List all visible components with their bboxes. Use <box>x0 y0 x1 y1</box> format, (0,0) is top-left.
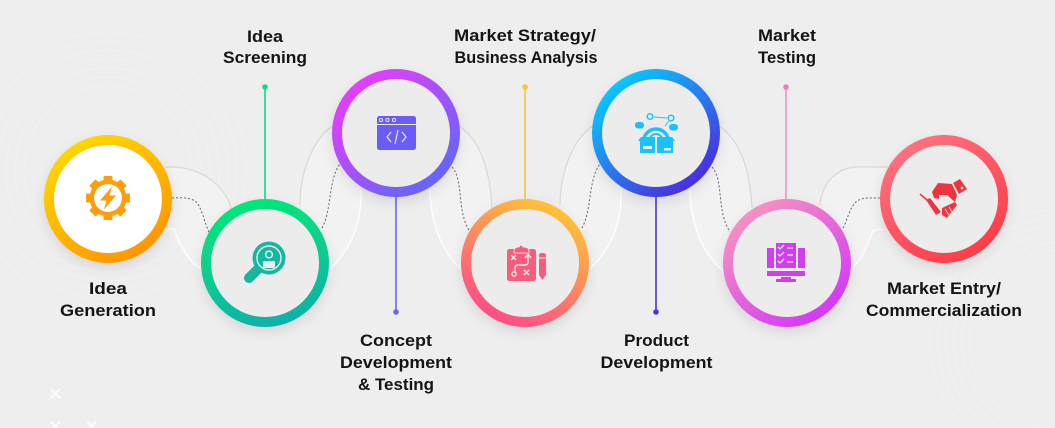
label: market testing: Testing <box>758 49 816 67</box>
step 2: idea screening <box>206 28 324 322</box>
label: market testing <box>758 27 817 67</box>
label: product development: Product <box>624 332 690 350</box>
label: concept development and testing <box>340 332 453 394</box>
icon: handshake <box>920 179 967 218</box>
label: market strategy and business analysis: Business Analysis <box>454 49 598 67</box>
step 3: concept development and testing <box>337 74 455 394</box>
background ring pattern: right <box>930 210 1055 428</box>
label: market entry and commercialization <box>866 280 1022 320</box>
step 5: product development <box>597 74 715 372</box>
connector: step 2 to 3 <box>300 125 362 270</box>
icon: clipboard plan and pencil <box>507 245 546 281</box>
stem and dot 4 <box>522 84 528 202</box>
label: product development <box>600 332 713 372</box>
background ring pattern: left <box>0 32 246 308</box>
label: market entry and commercialization: Commercialization <box>866 302 1022 320</box>
icon: magnifier with person <box>249 242 286 278</box>
ring 4 <box>466 204 584 322</box>
step 6: market testing <box>728 27 846 322</box>
ring 7 <box>885 140 1003 258</box>
label: idea generation: Idea <box>89 280 128 298</box>
label: product development: Development <box>600 354 713 372</box>
label: market strategy and business analysis <box>454 27 598 67</box>
step 1: idea generation <box>49 140 167 320</box>
label: idea screening <box>223 28 307 67</box>
label: idea generation: Generation <box>60 302 156 320</box>
connector: step 1 to 2 <box>165 167 232 272</box>
icon: code window <box>377 116 416 150</box>
icon: monitor with checklist <box>767 243 805 282</box>
step 7: market entry <box>866 140 1022 320</box>
stem and dot 5 <box>653 194 659 315</box>
ring 5 <box>597 74 715 192</box>
stem and dot 6 <box>783 84 789 202</box>
connector: step 6 to 7 <box>820 167 888 270</box>
icon: box with gear <box>635 114 678 153</box>
stem and dot 3 <box>393 194 399 315</box>
decorative x marks <box>51 389 96 428</box>
connector: step 3 to 4 <box>430 127 492 272</box>
label: idea screening: Idea <box>247 28 284 46</box>
label: concept development and testing: Concept <box>360 332 433 350</box>
ring 1 <box>49 140 167 258</box>
icon: gear with lightning <box>86 176 130 220</box>
label: concept development and testing: Development <box>340 354 453 372</box>
ring 2 <box>206 204 324 322</box>
ring 3 <box>337 74 455 192</box>
ring 6 <box>728 204 846 322</box>
step 4: market strategy <box>454 27 598 322</box>
label: market strategy and business analysis: Market Strategy/ <box>454 27 596 45</box>
label: market entry and commercialization: Market Entry/ <box>887 280 1001 298</box>
connector: step 5 to 6 <box>690 127 752 272</box>
stem and dot 2 <box>262 84 268 202</box>
connector: step 4 to 5 <box>560 125 622 270</box>
label: idea generation <box>60 280 156 320</box>
label: concept development and testing: & Testing <box>358 376 434 394</box>
label: idea screening: Screening <box>223 49 307 67</box>
label: market testing: Market <box>758 27 817 45</box>
